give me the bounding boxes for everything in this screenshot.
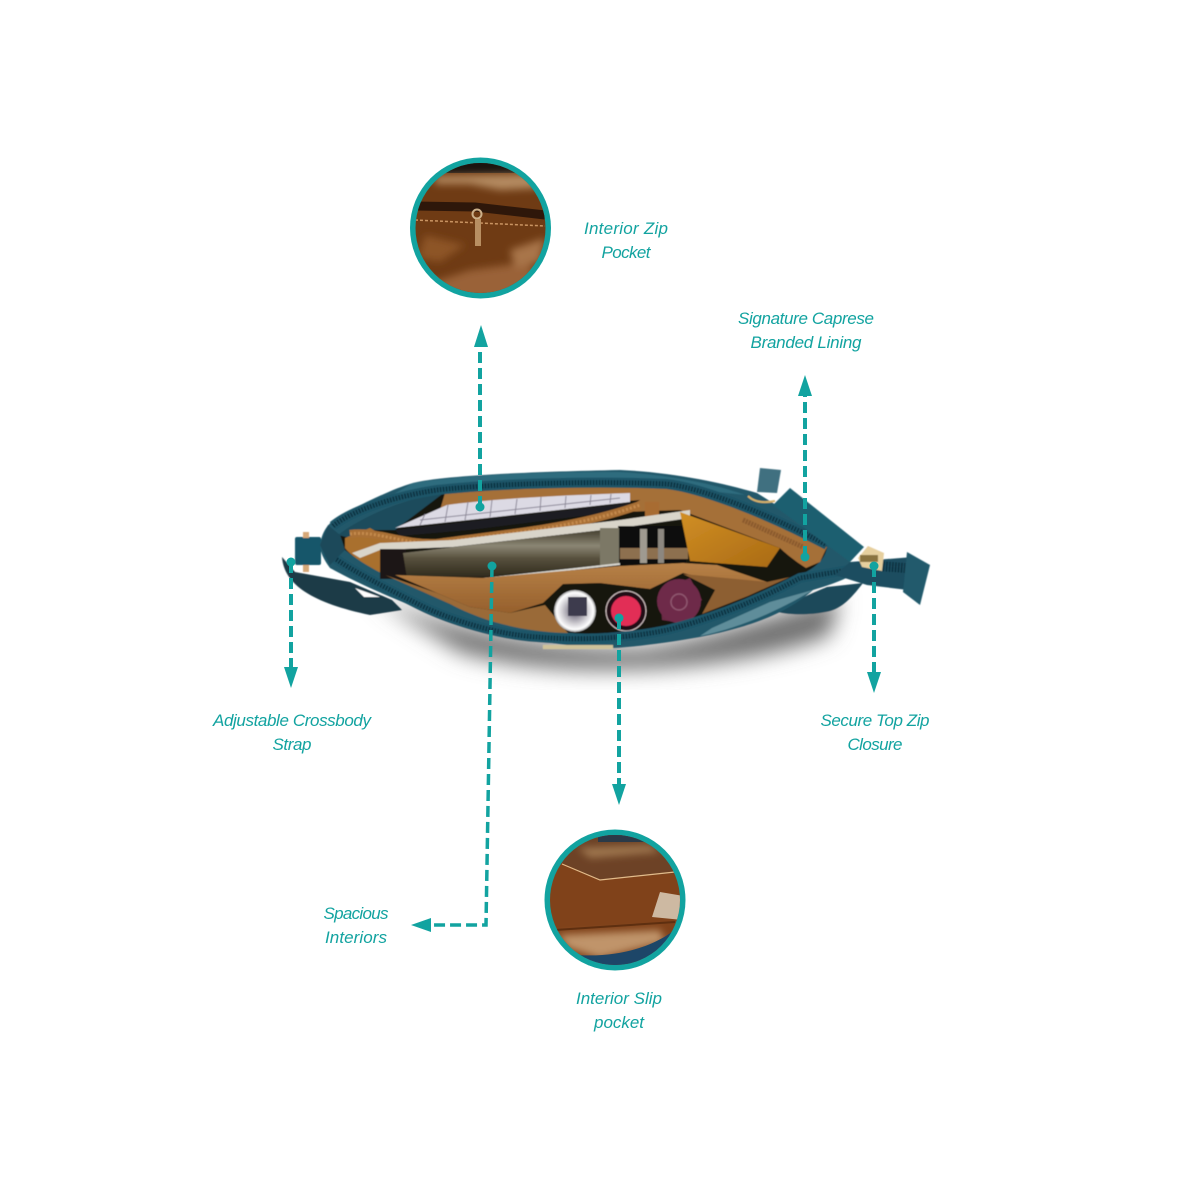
zip end cap [903,552,930,605]
left zip end [320,525,345,565]
pink lipstick [606,591,646,631]
lining zip [743,520,803,547]
label: adjustable crossbody strap: Strap [272,735,312,754]
label: interior slip pocket: Interior Slip [576,989,662,1008]
label: signature branded lining: Signature Caprese [738,309,874,328]
right leather tab [773,488,864,562]
label: signature branded lining: Branded Lining [750,333,862,352]
drop shadow [370,595,840,670]
top zipper [333,483,827,545]
cylinder object [403,528,620,579]
detail circle: interior slip pocket [544,830,687,975]
silver lipstick [554,590,596,632]
right strap under bag [778,583,863,614]
label: secure top zip closure: Closure [848,735,902,754]
gold zip slider [748,496,884,571]
zip pull in lining [645,502,659,522]
mustard pouch [680,512,780,567]
arrow: to interior slip pocket [612,614,626,805]
left lining [345,528,405,575]
arrow: to signature lining label [798,375,812,562]
strap loop tab [757,468,781,493]
document sheet [352,510,690,558]
left crossbody strap [282,532,402,615]
label: interior zip pocket [584,219,668,262]
bag interior opening [340,486,827,634]
label: spacious interiors: Interiors [325,928,388,947]
lower tan pocket [385,575,568,633]
tan lining back [440,486,827,568]
black cosmetic tube [600,526,688,566]
bag leather body [320,470,860,648]
front tan pocket [395,563,767,613]
arrow: to top zip label [867,562,881,693]
maroon lipstick [657,578,702,623]
label: secure top zip closure: Secure Top Zip [820,711,930,730]
label: adjustable crossbody strap: Adjustable Crossbody [212,711,372,730]
label: spacious interiors [324,904,389,947]
white strip [483,564,620,579]
front metal plate [543,645,613,649]
label: spacious interiors: Spacious [324,904,389,923]
stitched tan band [350,505,640,543]
notebook paper [395,493,630,528]
label: secure top zip closure [820,711,930,754]
arrow: to crossbody strap label [284,558,298,688]
dark rolled item end [380,549,406,579]
label: interior slip pocket [576,989,662,1032]
arrow: to interior zip pocket [474,325,488,512]
arrow: to spacious interiors label [411,562,496,932]
bottom zipper [327,552,860,639]
label: signature branded lining [738,309,874,352]
label: interior zip pocket: Interior Zip [584,219,668,238]
label: interior zip pocket: Pocket [602,243,652,262]
detail circle: interior zip pocket [410,158,552,300]
label: adjustable crossbody strap [212,711,372,754]
dark gap below notebook [395,503,630,536]
infographic canvas [212,158,931,1032]
bag photo [282,468,930,670]
dark teal flap under top zip [338,492,445,538]
label: interior slip pocket: pocket [593,1013,645,1032]
zip tail [835,557,913,590]
